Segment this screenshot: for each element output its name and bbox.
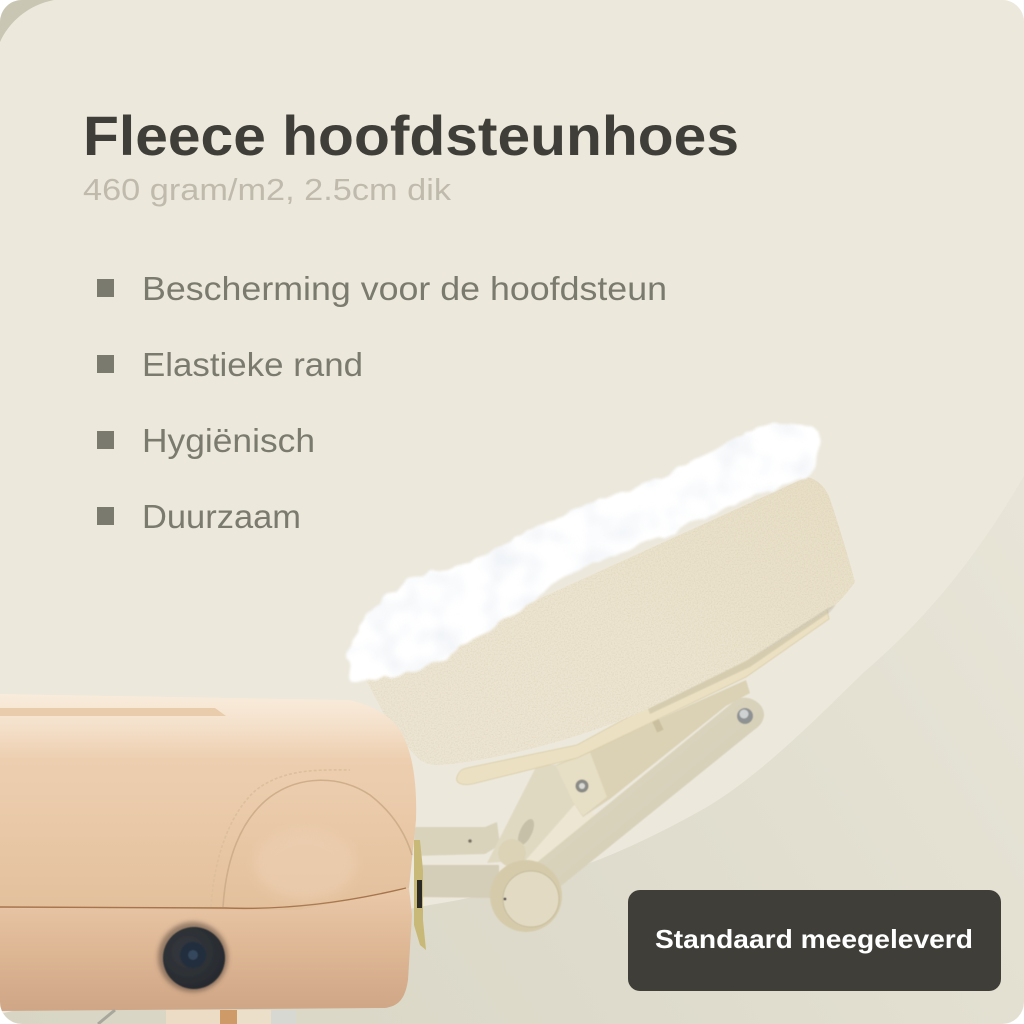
bullet: bescherming: Bescherming voor de hoofdsteun — [142, 270, 667, 307]
bullet: hygienisch — [97, 428, 313, 459]
upper cushion — [0, 694, 416, 911]
bullet: duurzaam — [97, 505, 299, 528]
brass hinge — [414, 840, 426, 950]
roller knob — [490, 860, 562, 932]
large arm — [535, 698, 764, 886]
bullet list — [97, 270, 667, 535]
upper horizontal tube — [414, 822, 500, 856]
subtitle: 460 gram/m2, 2.5cm dik — [83, 172, 452, 207]
bullet: elastieke rand: Elastieke rand — [142, 346, 363, 383]
fabric cover — [365, 477, 855, 765]
left brace — [487, 763, 577, 863]
badge: standaard meegeleverd — [628, 890, 1001, 991]
badge: standaard meegeleverd: Standaard meegeleverd — [655, 924, 973, 954]
table legs — [98, 1010, 296, 1024]
rivet left — [576, 780, 588, 792]
adjustment knob — [158, 922, 228, 992]
rivet right — [737, 708, 753, 724]
stitched corner panel — [223, 780, 412, 907]
bracket plate — [556, 680, 750, 817]
title: Fleece hoofdsteunhoes — [83, 104, 739, 167]
tray under the headrest — [457, 609, 829, 785]
massage table cushion — [0, 694, 416, 1011]
bullet: duurzaam: Duurzaam — [142, 498, 301, 535]
bullet: elastieke rand — [97, 352, 361, 376]
joint — [498, 839, 526, 867]
head slot — [0, 708, 226, 716]
lower horizontal tube — [418, 865, 499, 898]
fleece lining — [347, 425, 818, 682]
lower cushion — [0, 888, 412, 1011]
headrest frame — [414, 680, 764, 932]
bullet: hygienisch: Hygiënisch — [142, 422, 315, 459]
seam — [0, 888, 406, 908]
